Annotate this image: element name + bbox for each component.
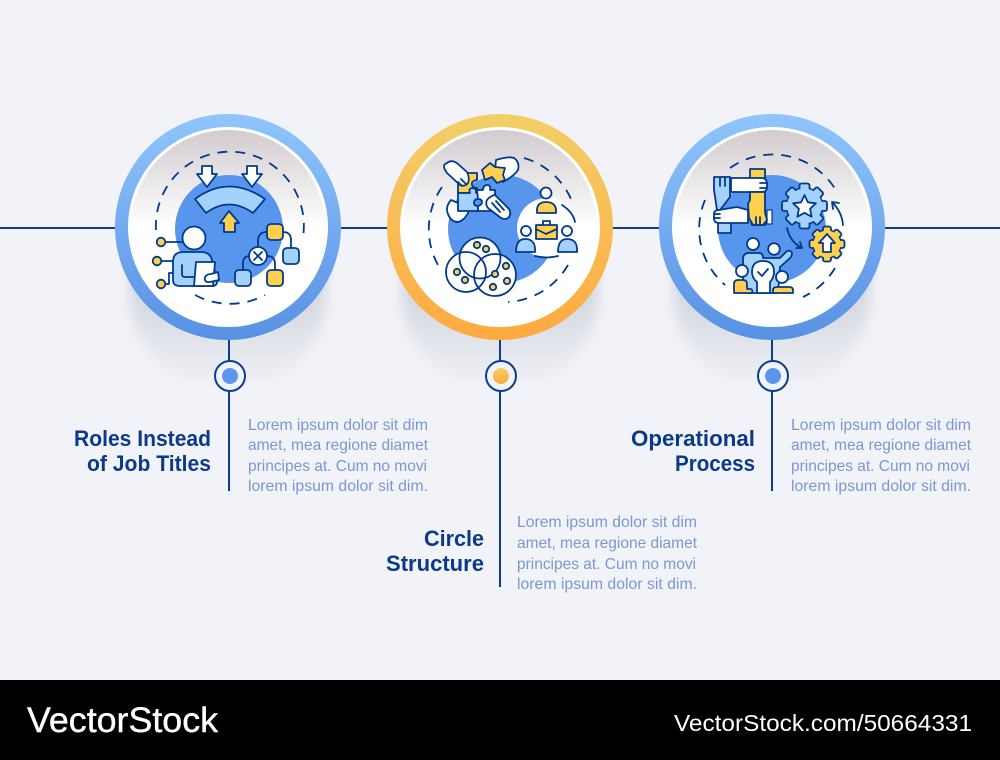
step 3: operational process [631,114,972,495]
node marker 2 [486,361,516,391]
step 1: roles instead of job titles [74,114,429,495]
body text 2: Lorem ipsum dolor sit dim [517,514,697,531]
white disc 1 [128,127,328,327]
footer url: VectorStock.com/50664331 [674,710,972,736]
connector line 2 [499,340,501,587]
footer bar [0,680,1000,760]
heading 2: Circle [424,526,484,551]
body text 1: Lorem ipsum dolor sit dim [248,417,428,434]
footer logo text: VectorStock [27,700,218,740]
small gear [810,226,844,262]
white disc 3 [672,127,872,327]
white disc 2 [400,127,600,327]
icon: operational process [699,154,844,297]
body text 3: lorem ipsum dolor sit dim. [791,478,971,495]
body text 2: lorem ipsum dolor sit dim. [517,576,697,593]
body text 1: principes at. Cum no movi [248,458,427,475]
circle shadow 2 [402,195,598,391]
body text 1 [248,417,429,495]
node marker 1 [215,361,245,391]
large gear [782,184,827,228]
body text 2: amet, mea regione diamet [517,535,698,552]
body text 2: principes at. Cum no movi [517,556,696,573]
node marker 3 [758,361,788,391]
body text 3: Lorem ipsum dolor sit dim [791,417,971,434]
icon: roles [153,152,304,304]
shaded inner disc 2 [403,130,597,324]
circle shadow 3 [674,195,870,391]
shaded inner disc 3 [675,130,869,324]
timeline horizontal line [0,227,1000,229]
heading 1: Roles Instead [74,426,211,451]
step 2: circle structure [386,114,698,593]
heading 1 line 2: of Job Titles [87,451,211,476]
body text 1: lorem ipsum dolor sit dim. [248,478,428,495]
body text 1: amet, mea regione diamet [248,437,429,454]
connector line 3 [771,340,773,491]
gradient ring 1 [115,114,341,340]
connector line 1 [228,340,230,491]
body text 3 [791,417,972,495]
gradient ring 2 [387,114,613,340]
shaded inner disc 1 [131,130,325,324]
circle shadow 1 [130,195,326,391]
gradient ring 3 [659,114,885,340]
heading 3: Operational [631,426,755,451]
heading 3 line 2: Process [675,451,755,476]
heading 2 line 2: Structure [386,551,484,576]
body text 3: principes at. Cum no movi [791,458,970,475]
body text 2 [517,514,698,593]
icon: circle structure [429,157,577,302]
body text 3: amet, mea regione diamet [791,437,972,454]
